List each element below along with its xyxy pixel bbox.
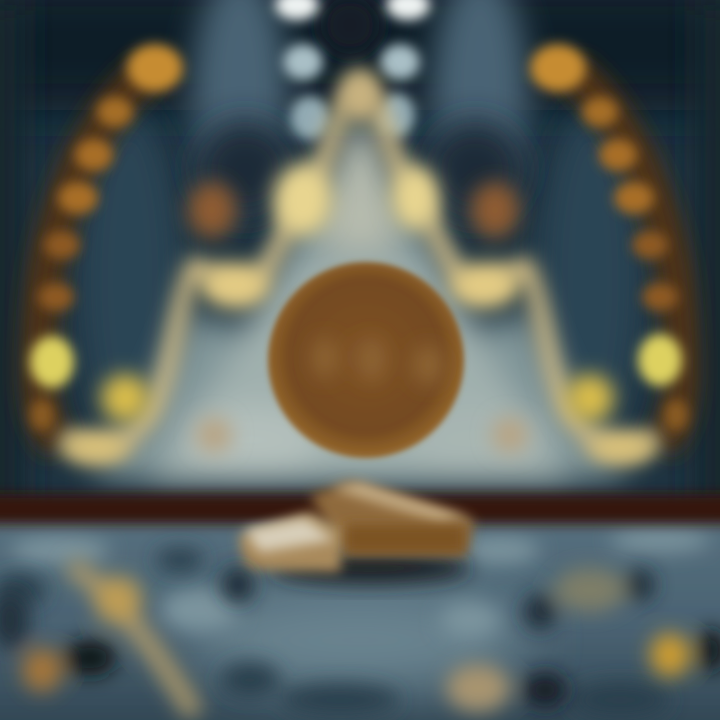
light mountain behind the coin [90,110,630,485]
gold coin [268,262,464,458]
dark red shelf band [0,494,720,524]
floor reflections and dark spots [0,565,720,715]
left arc of gold lights [30,44,183,445]
top light dots [275,0,430,140]
glowing zigzag line [70,85,650,450]
floor [0,515,720,720]
bright gold highlights [61,69,656,463]
gold bars [238,482,475,584]
right arc of gold lights [530,44,688,445]
